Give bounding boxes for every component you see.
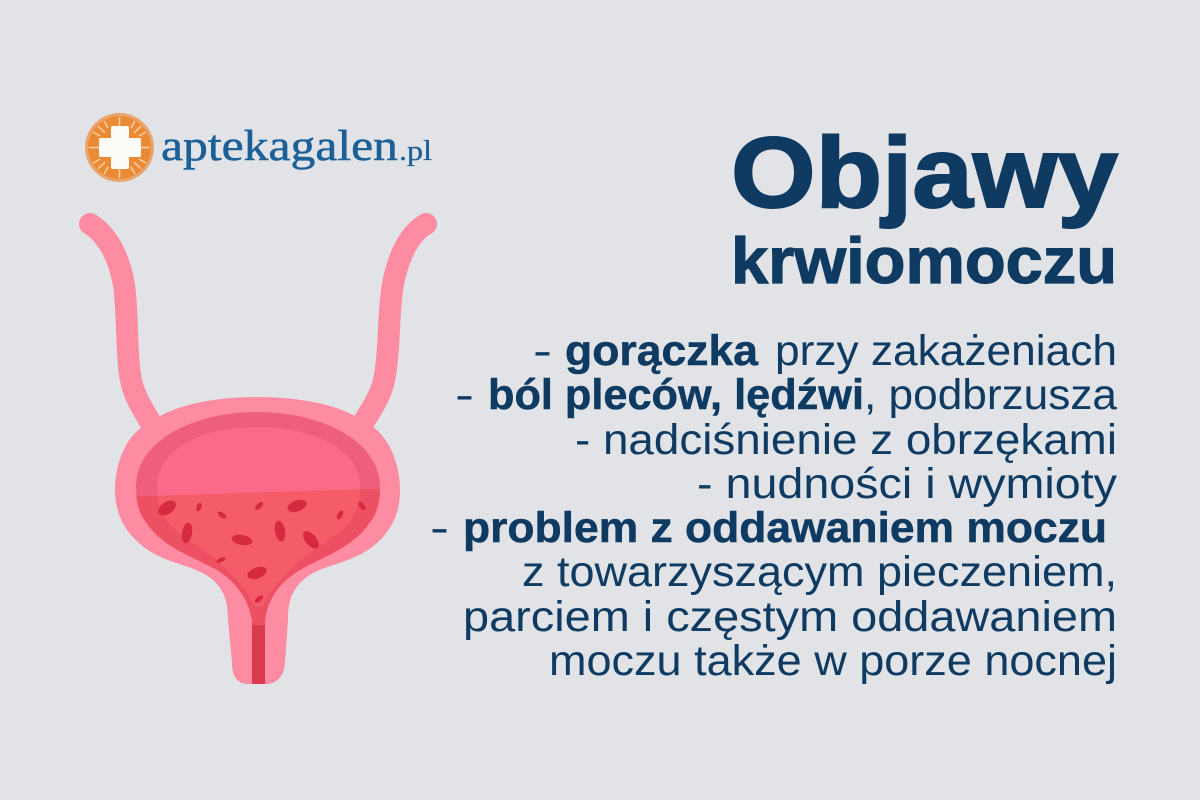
bladder wall: [115, 397, 400, 684]
red blood cells: [155, 497, 367, 604]
logo: aptekagalen.pl: [85, 113, 432, 182]
line: ból pleców: ból pleców, lędźwi: [488, 371, 864, 419]
urethra stream: [252, 625, 265, 684]
left ureter: [90, 224, 154, 428]
symptoms list: [430, 327, 1118, 685]
line: nudności: - nudności i wymioty: [697, 460, 1118, 508]
bloody urine: [158, 489, 360, 606]
line: ból pleców: , podbrzusza: [864, 371, 1117, 419]
line: gorączka: gorączka: [565, 327, 759, 375]
right ureter: [360, 224, 426, 428]
line: gorączka: -: [533, 327, 552, 375]
bladder lumen: [157, 427, 360, 606]
line: moczu także: moczu także w porze nocnej: [549, 637, 1117, 685]
line: nadciśnienie: - nadciśnienie z obrzękami: [575, 416, 1117, 464]
title: [731, 117, 1118, 297]
line: problem z oddawaniem moczu: problem z oddawaniem moczu: [463, 504, 1107, 552]
line: ból pleców: [455, 371, 1117, 419]
illustration: bladder with blood in urine: [90, 224, 426, 684]
line: ból pleców: -: [455, 371, 474, 419]
icon: orange circle with white cross: [85, 113, 154, 182]
inner wall: [136, 412, 380, 684]
title line 2: krwiomoczu: [731, 224, 1117, 297]
line: gorączka: [533, 327, 1117, 375]
inner wall, blood level: [136, 488, 380, 625]
line: problem z oddawaniem moczu: -: [430, 504, 449, 552]
title line 1: Objawy: [731, 117, 1118, 229]
logo wordmark: aptekagalen: [161, 123, 398, 170]
line: gorączka: przy zakażeniach: [775, 327, 1117, 375]
line: parciem: parciem i częstym oddawaniem: [463, 593, 1117, 641]
logo suffix: .pl: [399, 135, 432, 167]
line: z towarzyszącym: z towarzyszącym pieczeniem,: [522, 548, 1117, 596]
